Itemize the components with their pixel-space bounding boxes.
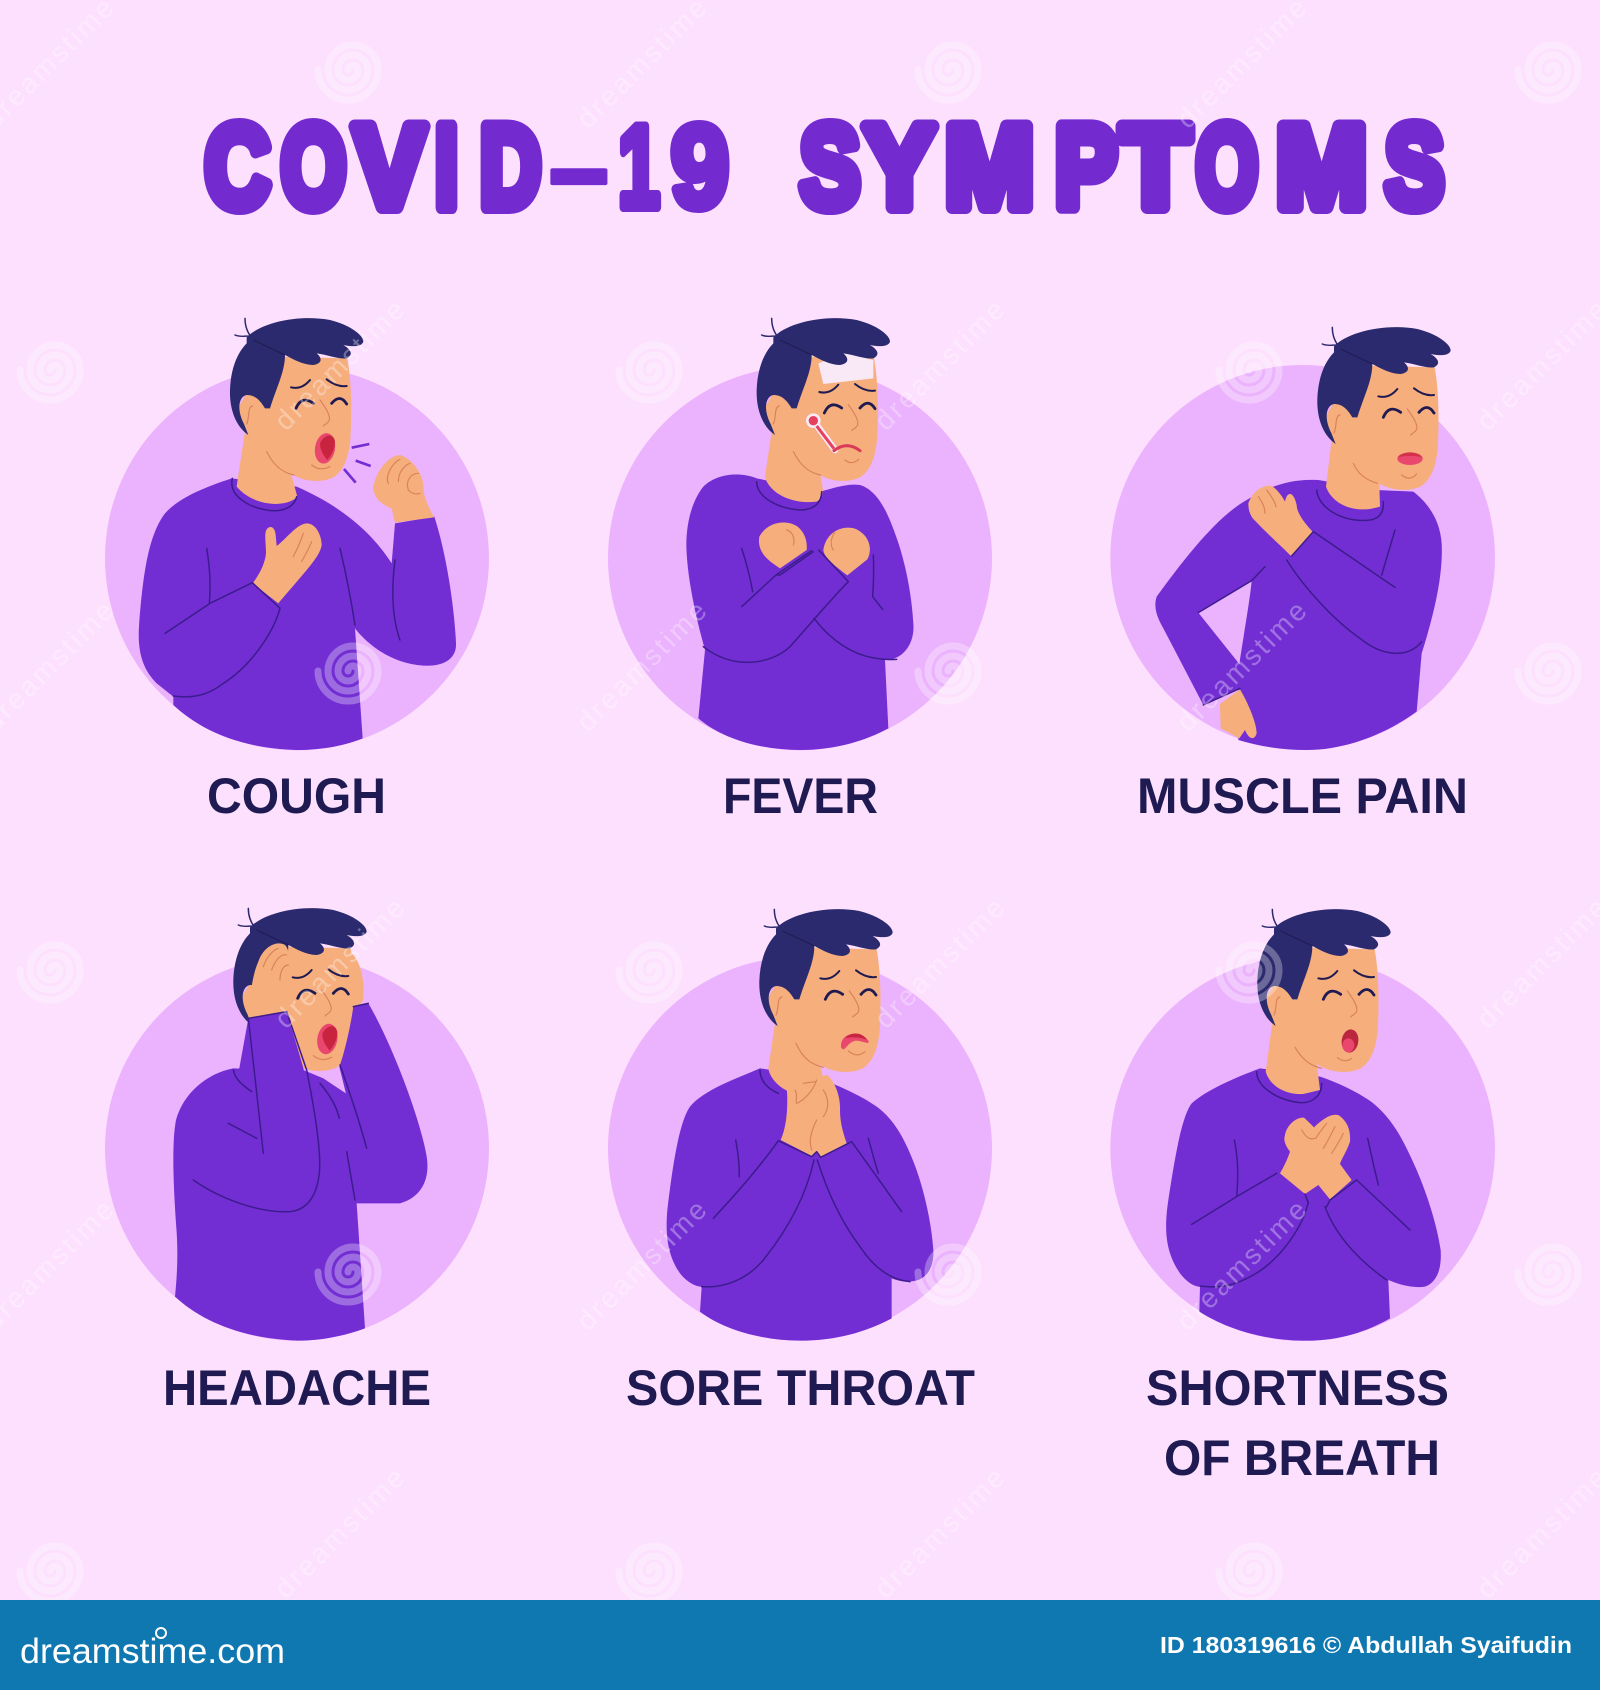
footer logo spiral — [156, 1628, 166, 1638]
title: 1 — [618, 101, 660, 232]
title: S — [800, 101, 860, 232]
fist — [373, 455, 434, 523]
mouth — [1340, 1028, 1360, 1054]
title: C — [205, 101, 270, 232]
panel: cough — [105, 318, 489, 824]
watermark text: dreamstime — [868, 892, 1010, 1034]
thermometer — [806, 413, 835, 450]
title — [205, 101, 1444, 232]
title: S — [1385, 101, 1444, 232]
watermark text: dreamstime — [268, 892, 410, 1034]
illustration: man coughing — [105, 318, 489, 750]
title: Y — [864, 101, 935, 232]
title: M — [1276, 101, 1367, 232]
label: muscle pain: MUSCLE PAIN — [1137, 768, 1468, 824]
watermark text: dreamstime — [1170, 595, 1312, 737]
panel: muscle pain — [1110, 327, 1495, 824]
label: cough: COUGH — [207, 768, 386, 824]
raised arms — [223, 1003, 427, 1212]
title: I — [435, 101, 458, 232]
label: shortness of breath: SHORTNESS — [1146, 1360, 1449, 1416]
title: O — [281, 101, 346, 232]
title: P — [1055, 101, 1117, 232]
footer logo text: dreamstime.com — [20, 1632, 285, 1671]
forehead patch — [818, 353, 873, 384]
label: shortness of breath — [1146, 1360, 1449, 1486]
watermark text: dreamstime — [1170, 1194, 1312, 1336]
illustration: man holding chest — [1110, 909, 1495, 1341]
label: headache: HEADACHE — [163, 1360, 431, 1416]
illustration: man holding throat — [608, 909, 992, 1341]
title: 9 — [671, 101, 729, 232]
footer credit: ID 180319616 © Abdullah Syaifudin — [1160, 1632, 1572, 1658]
title: M — [945, 101, 1034, 232]
crossed fists — [759, 523, 870, 575]
mouth — [315, 1022, 340, 1056]
mouth — [312, 431, 338, 465]
title: V — [354, 101, 425, 232]
label: shortness of breath: OF BREATH — [1164, 1430, 1440, 1486]
frown mouth — [834, 446, 860, 451]
cough lines — [344, 444, 371, 483]
hands on throat — [781, 1075, 847, 1157]
hands on head — [249, 943, 364, 1015]
watermark text: dreamstime — [868, 1462, 1010, 1604]
title: T — [1121, 101, 1190, 232]
watermark text: dreamstime — [570, 1194, 712, 1336]
panel: fever — [608, 318, 992, 824]
mouth — [1397, 452, 1423, 465]
title: - — [545, 101, 613, 232]
chest hand — [253, 523, 322, 603]
illustration: man holding head — [105, 908, 489, 1341]
panel: shortness of breath — [1110, 909, 1495, 1486]
crossed hands — [1280, 1115, 1352, 1199]
footer bar — [0, 1600, 1600, 1690]
mouth — [841, 1034, 869, 1049]
illustration: man with fever — [608, 318, 992, 750]
watermark text: dreamstime — [570, 595, 712, 737]
panel: sore throat — [608, 909, 992, 1416]
watermark text: dreamstime — [268, 1462, 410, 1604]
watermark text: dreamstime — [868, 294, 1010, 436]
illustration: man holding shoulder — [1110, 327, 1495, 750]
shoulder hand — [1248, 486, 1313, 557]
hip hand — [1220, 689, 1257, 738]
gap between arm and torso — [1198, 581, 1252, 664]
title: D — [480, 101, 541, 232]
label: sore throat: SORE THROAT — [626, 1360, 975, 1416]
panel: headache — [105, 908, 489, 1416]
watermark text: dreamstime — [268, 294, 410, 436]
title: O — [1196, 101, 1258, 232]
label: fever: FEVER — [723, 768, 878, 824]
